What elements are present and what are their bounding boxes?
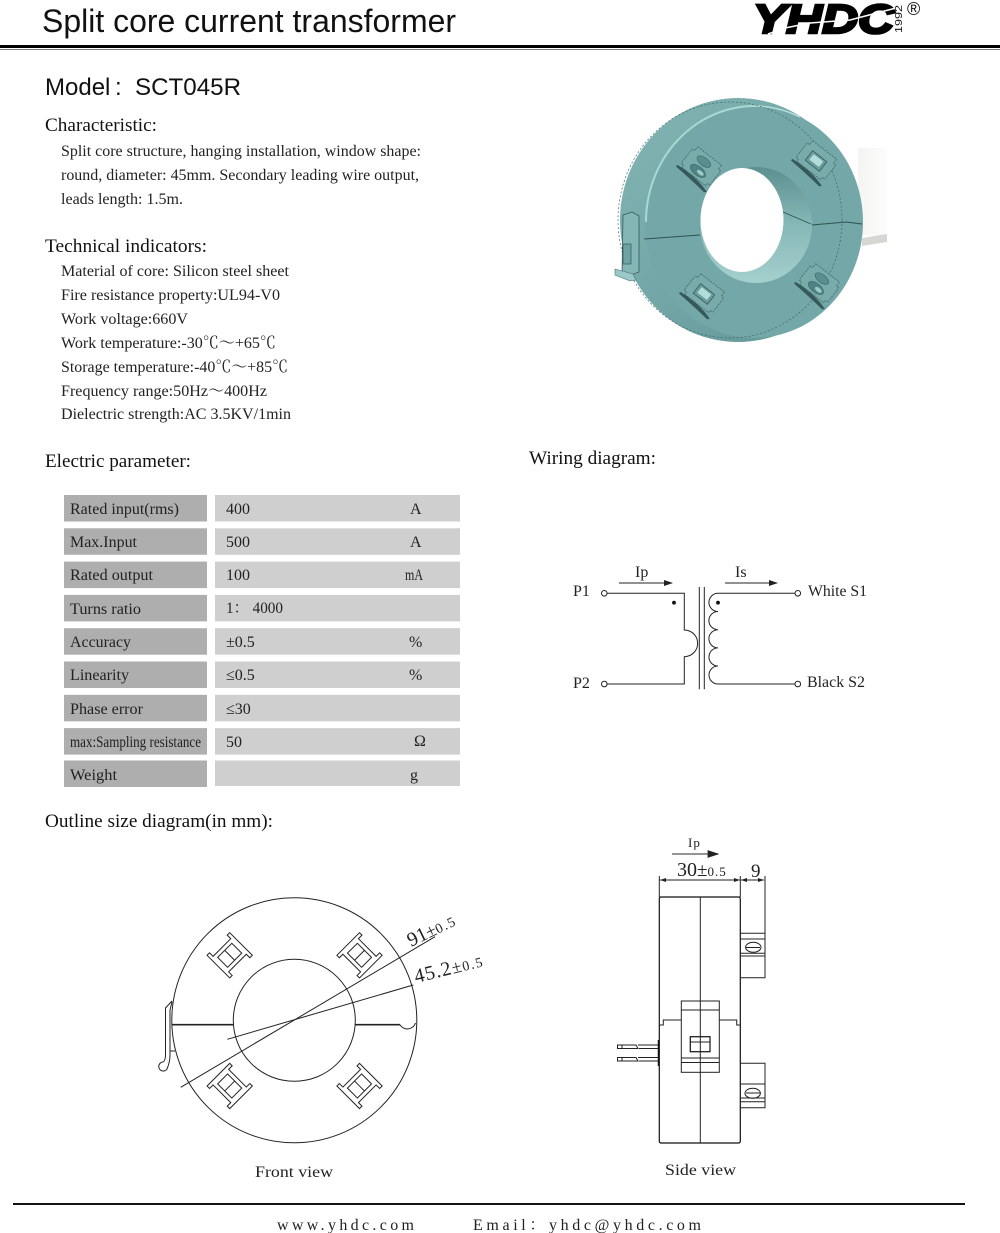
wiring diagram: P1	[573, 583, 590, 600]
row: rated input: A	[410, 501, 422, 518]
row: linearity: ≤0.5	[226, 667, 255, 684]
heading: electric parameter: Electric parameter:	[45, 451, 191, 472]
leads	[618, 1045, 658, 1048]
wiring diagram: P2	[573, 675, 590, 692]
clip	[159, 1001, 175, 1071]
side view drawing: Ip	[688, 835, 701, 850]
row: rated input: Rated input(rms)	[70, 501, 179, 518]
side view drawing: 9	[751, 861, 760, 882]
footer rule	[13, 1203, 965, 1205]
section: technical indicators: Frequency range:50Hz～400Hz	[61, 383, 267, 400]
header rule	[0, 45, 1000, 50]
logo: YHDC 1992: 1992	[894, 4, 905, 33]
heading: outline size diagram: Outline size diagram(in mm):	[45, 811, 273, 832]
section: characteristic: leads length: 1.5m.	[61, 191, 183, 208]
transformer core	[699, 587, 704, 689]
mounting windows	[207, 933, 252, 978]
row: weight: Weight	[70, 767, 118, 784]
section: technical indicators: Work temperature:-30℃～+65℃	[61, 335, 276, 352]
heading: wiring diagram: Wiring diagram:	[529, 448, 656, 469]
model heading: :	[115, 74, 122, 101]
section: characteristic: round, diameter: 45mm. Secondary leading wire output,	[61, 167, 419, 184]
wiring diagram: Black S2	[807, 674, 865, 691]
row: weight	[64, 760, 460, 787]
section: characteristic	[45, 115, 421, 208]
row: sampling resistance	[64, 728, 460, 755]
side view drawing: 30±0.5	[677, 859, 727, 881]
row: sampling resistance: max:Sampling resistance	[70, 734, 201, 751]
row: rated output	[64, 562, 460, 588]
row: turns ratio	[64, 595, 460, 621]
row: max input: 500	[226, 534, 250, 551]
product photo: ring transformer	[615, 98, 887, 342]
row: linearity	[64, 662, 460, 688]
secondary winding	[709, 593, 795, 684]
row: phase error: Phase error	[70, 701, 144, 718]
section: technical indicators	[45, 236, 291, 423]
row: turns ratio: Turns ratio	[70, 601, 141, 618]
section: technical indicators: Fire resistance property:UL94-V0	[61, 287, 280, 304]
row: rated input: 400	[226, 501, 250, 518]
row: accuracy	[64, 628, 460, 655]
dimension lines	[181, 937, 435, 1087]
row: phase error	[64, 695, 460, 721]
split lines	[172, 1024, 400, 1026]
row: linearity: %	[409, 667, 422, 684]
section: characteristic: Characteristic:	[45, 115, 157, 136]
row: rated input	[64, 495, 460, 522]
row: max input: A	[410, 534, 422, 551]
front view drawing: 45.2±0.5	[412, 949, 486, 988]
section: technical indicators: Work voltage:660V	[61, 311, 188, 328]
dimensions	[659, 876, 765, 933]
row: accuracy: Accuracy	[70, 634, 131, 651]
front view drawing: 91±0.5	[404, 909, 460, 951]
section: technical indicators: Technical indicators:	[45, 236, 207, 257]
tabs	[740, 933, 765, 978]
model heading: SCT045R	[135, 74, 241, 101]
section: technical indicators: Dielectric strength:AC 3.5KV/1min	[61, 406, 291, 423]
section: technical indicators: Storage temperature:-40℃～+85℃	[61, 359, 288, 376]
row: max input	[64, 528, 460, 555]
row: accuracy: ±0.5	[226, 634, 255, 651]
row: phase error: ≤30	[226, 701, 251, 718]
row: sampling resistance: 50	[226, 734, 242, 751]
page header title: Split core current transformer	[42, 3, 456, 39]
row: rated output: 100	[226, 567, 250, 584]
clip	[681, 1001, 719, 1072]
row: weight: g	[410, 767, 418, 784]
footer contact text	[277, 1217, 702, 1233]
wiring diagram: White S1	[808, 583, 867, 600]
logo: YHDC 1992	[753, 0, 920, 42]
row: sampling resistance: Ω	[414, 733, 426, 750]
row: rated output: mA	[405, 567, 423, 584]
wiring diagram	[573, 564, 867, 692]
row: max input: Max.Input	[70, 534, 138, 551]
wiring diagram: Ip	[635, 564, 648, 581]
wiring diagram: Is	[735, 564, 747, 581]
row: linearity: Linearity	[70, 667, 129, 684]
caption: front view: Front view	[255, 1164, 333, 1181]
model heading: Model	[45, 74, 110, 101]
row: turns ratio: 1： 4000	[226, 600, 283, 617]
body	[659, 897, 740, 1143]
section: technical indicators: Material of core: Silicon steel sheet	[61, 263, 290, 280]
caption: side view: Side view	[665, 1162, 736, 1179]
section: characteristic: Split core structure, hanging installation, window shape:	[61, 143, 421, 160]
front view drawing	[159, 898, 486, 1143]
row: accuracy: %	[409, 634, 422, 651]
row: rated output: Rated output	[70, 567, 154, 584]
parameter table	[64, 495, 460, 787]
side view drawing	[618, 835, 765, 1143]
primary winding	[607, 593, 698, 684]
